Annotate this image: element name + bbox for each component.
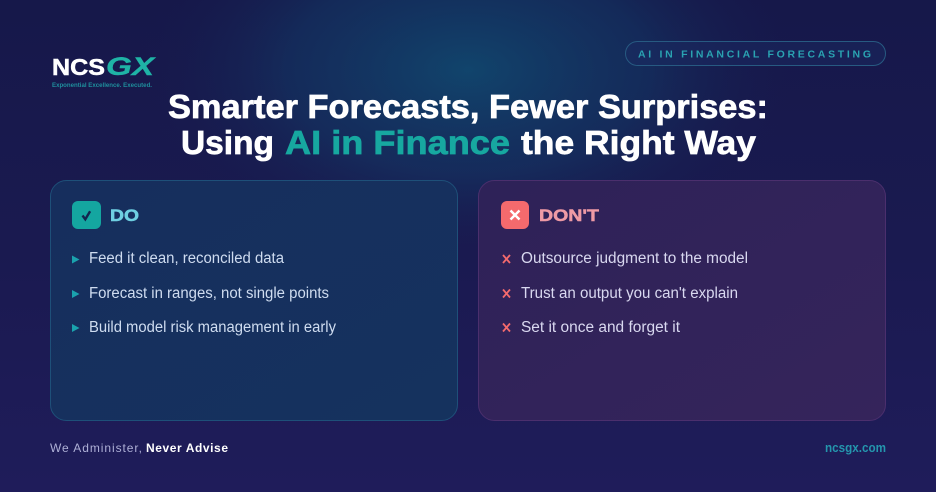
- footer: website: ncsgx.com: [825, 441, 886, 455]
- do list: Forecast in ranges, not single points: [89, 285, 329, 302]
- footer: tagline: We Administer,: [50, 441, 142, 455]
- don't list: Outsource judgment to the model: [521, 250, 748, 267]
- do list: [72, 250, 336, 336]
- panel: don't: [478, 180, 886, 420]
- title: the Right Way: [521, 124, 757, 161]
- icon: cross: [501, 201, 529, 229]
- panel: do: [50, 180, 458, 420]
- don't list: [503, 250, 748, 336]
- don't list: Trust an output you can't explain: [521, 285, 738, 302]
- do list: Feed it clean, reconciled data: [89, 250, 284, 267]
- footer: tagline: [50, 441, 228, 455]
- heading: don't: DON'T: [539, 206, 600, 225]
- footer: tagline: Never Advise: [146, 441, 228, 455]
- heading: do: DO: [110, 206, 139, 225]
- logo: NCSGX: Exponential Excellence. Executed.: [52, 83, 152, 89]
- title: AI in Finance: [285, 124, 510, 161]
- logo: NCSGX: GX: [106, 53, 156, 81]
- title: [168, 88, 768, 161]
- tag pill: AI in financial forecasting: AI IN FINANCIAL FORECASTING: [638, 48, 871, 60]
- do list: Build model risk management in early: [89, 319, 336, 336]
- title: Using: [181, 124, 274, 161]
- logo: NCSGX: [52, 53, 156, 89]
- don't list: Set it once and forget it: [521, 319, 681, 336]
- tag pill: AI in financial forecasting: [626, 42, 886, 66]
- title: Smarter Forecasts, Fewer Surprises:: [168, 88, 768, 125]
- icon: check: [72, 201, 101, 229]
- logo: NCSGX: NCS: [52, 54, 105, 80]
